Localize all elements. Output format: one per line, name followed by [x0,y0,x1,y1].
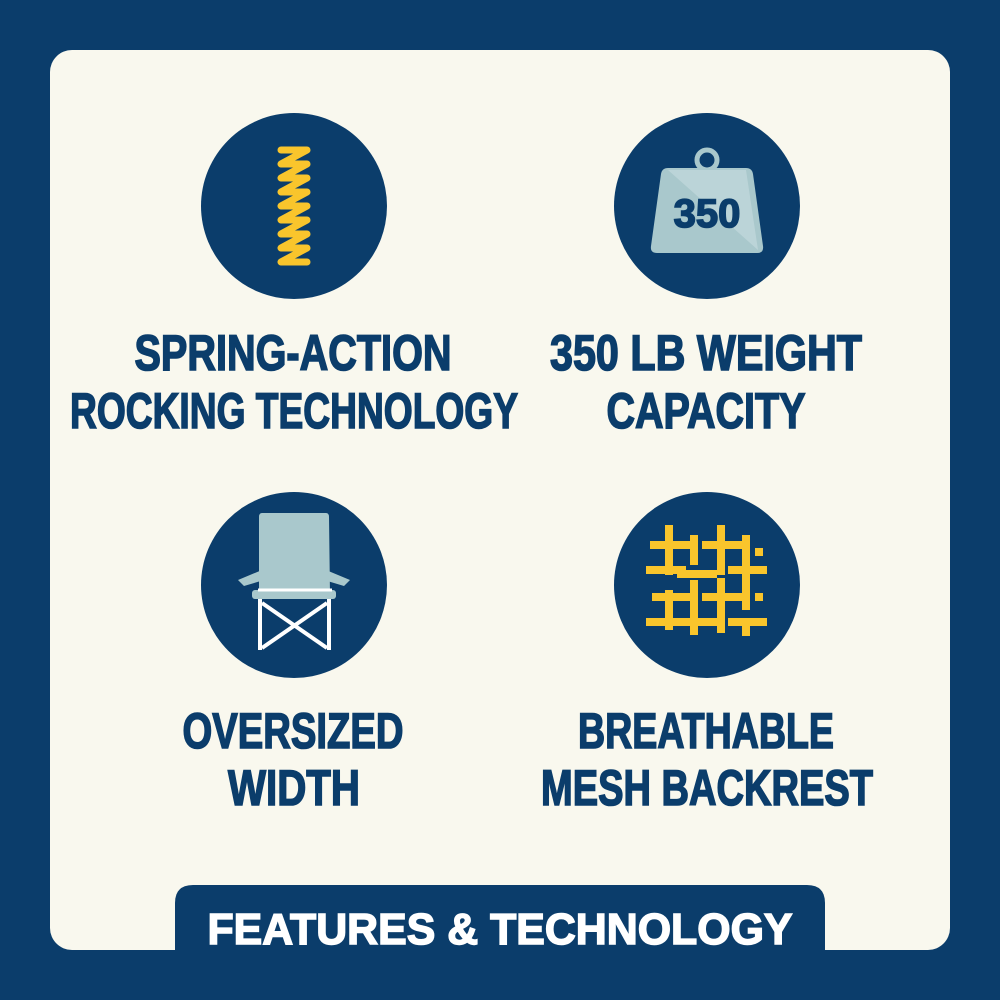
heading: spring-action [70,325,518,439]
heading: breathable mesh: BREATHABLE [578,703,834,759]
footer tab: FEATURES & TECHNOLOGY [208,905,792,954]
heading: breathable mesh [541,703,873,816]
heading: spring-action: SPRING-ACTION [134,325,452,381]
icon: 350 weight: 350 [674,192,740,236]
heading: weight capacity [550,325,862,439]
footer tab [175,885,825,960]
icon: spring [201,113,387,299]
icon: chair [201,492,387,678]
heading: oversized width [182,703,404,816]
heading: breathable mesh: MESH BACKREST [541,760,873,816]
heading: spring-action: ROCKING TECHNOLOGY [70,383,518,439]
heading: weight capacity: 350 LB WEIGHT [550,325,862,381]
icon: mesh [614,492,800,678]
heading: weight capacity: CAPACITY [606,383,806,439]
heading: oversized width: OVERSIZED [182,703,404,759]
heading: oversized width: WIDTH [228,760,360,816]
icon: 350 weight [614,113,800,299]
